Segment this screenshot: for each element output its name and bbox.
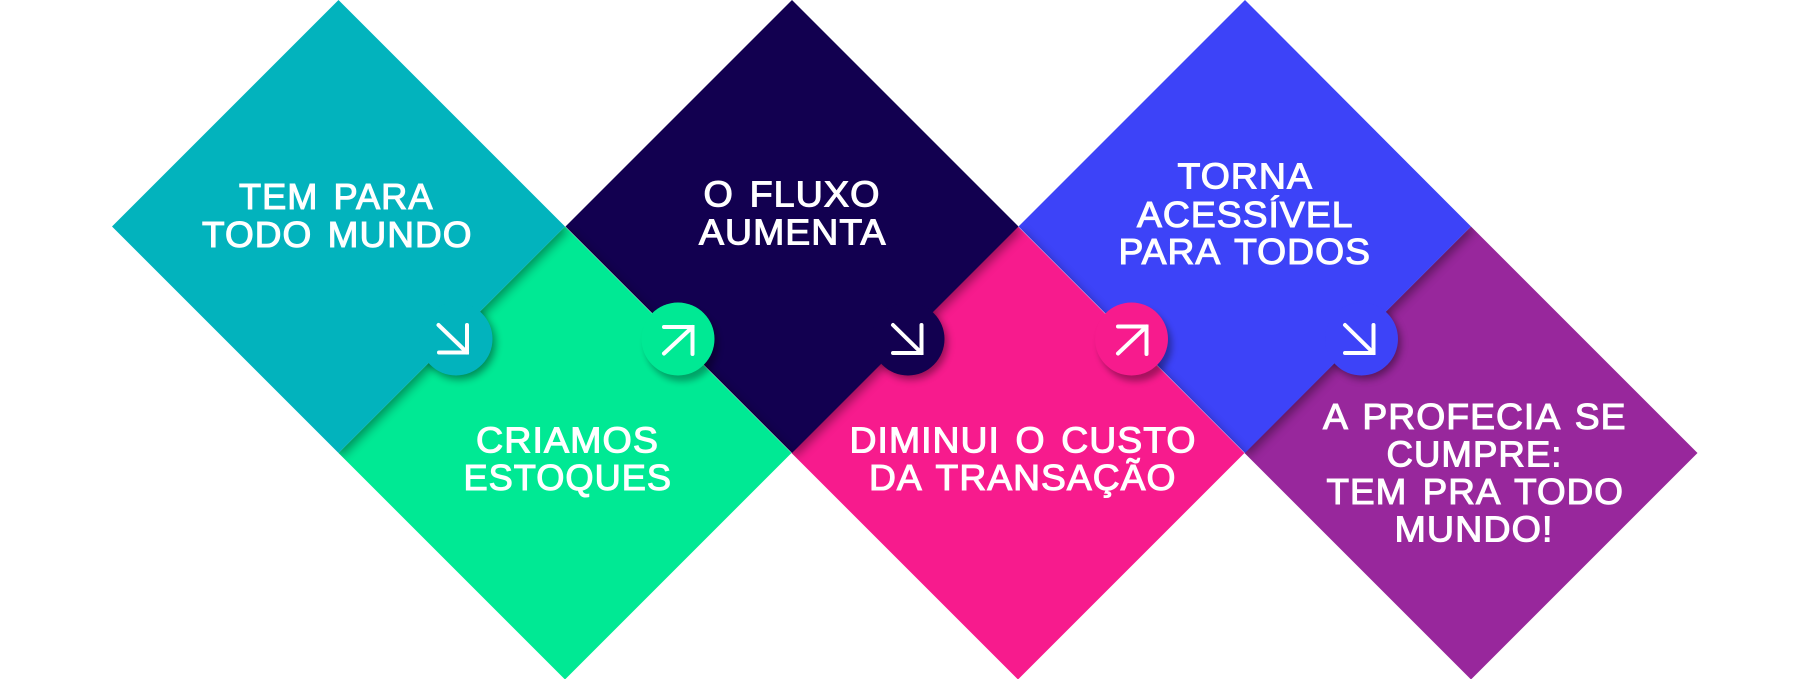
panel: teal diamond, tem para todo mundo xyxy=(112,0,568,457)
text: tem para todo mundo: TEM PARA xyxy=(239,176,434,217)
icon: blue circle arrow down-right xyxy=(1325,302,1398,376)
text: a profecia se cumpre xyxy=(1323,396,1626,550)
text: diminui o custo da transacao: DIMINUI O CUSTO xyxy=(850,420,1196,460)
icon: green circle arrow up-right xyxy=(642,302,718,382)
text: o fluxo aumenta xyxy=(699,174,886,252)
text: criamos estoques: CRIAMOS xyxy=(476,420,659,460)
text: a profecia se cumpre: MUNDO! xyxy=(1394,508,1554,550)
panel: pink diamond, diminui o custo xyxy=(792,226,1248,679)
panel: navy diamond, o fluxo aumenta xyxy=(566,0,1022,457)
text: diminui o custo da transacao: DA TRANSAÇÃO xyxy=(869,457,1176,498)
text: a profecia se cumpre: A PROFECIA SE xyxy=(1323,396,1626,437)
panel: blue diamond, torna acessivel xyxy=(1018,0,1474,457)
icon: teal circle arrow down-right xyxy=(420,302,492,376)
icon: pink circle arrow up-right xyxy=(1095,302,1172,382)
text: a profecia se cumpre: CUMPRE: xyxy=(1386,434,1562,474)
text: tem para todo mundo xyxy=(202,176,472,255)
text: torna acessivel para todos: ACESSÍVEL xyxy=(1137,194,1354,235)
text: a profecia se cumpre: TEM PRA TODO xyxy=(1326,471,1624,512)
text: criamos estoques xyxy=(464,420,672,498)
text: torna acessivel para todos xyxy=(1118,156,1371,272)
text: o fluxo aumenta: AUMENTA xyxy=(699,212,886,252)
text: criamos estoques: ESTOQUES xyxy=(464,457,672,498)
icon: navy circle arrow down-right xyxy=(872,302,944,376)
text: torna acessivel para todos: TORNA xyxy=(1178,156,1313,196)
text: diminui o custo da transacao xyxy=(850,420,1196,498)
text: o fluxo aumenta: O FLUXO xyxy=(704,174,880,214)
panel: green diamond, criamos estoques xyxy=(338,226,794,679)
text: tem para todo mundo: TODO MUNDO xyxy=(202,214,472,255)
text: torna acessivel para todos: PARA TODOS xyxy=(1118,231,1371,272)
panel: purple diamond, a profecia se cumpre xyxy=(1244,226,1698,679)
